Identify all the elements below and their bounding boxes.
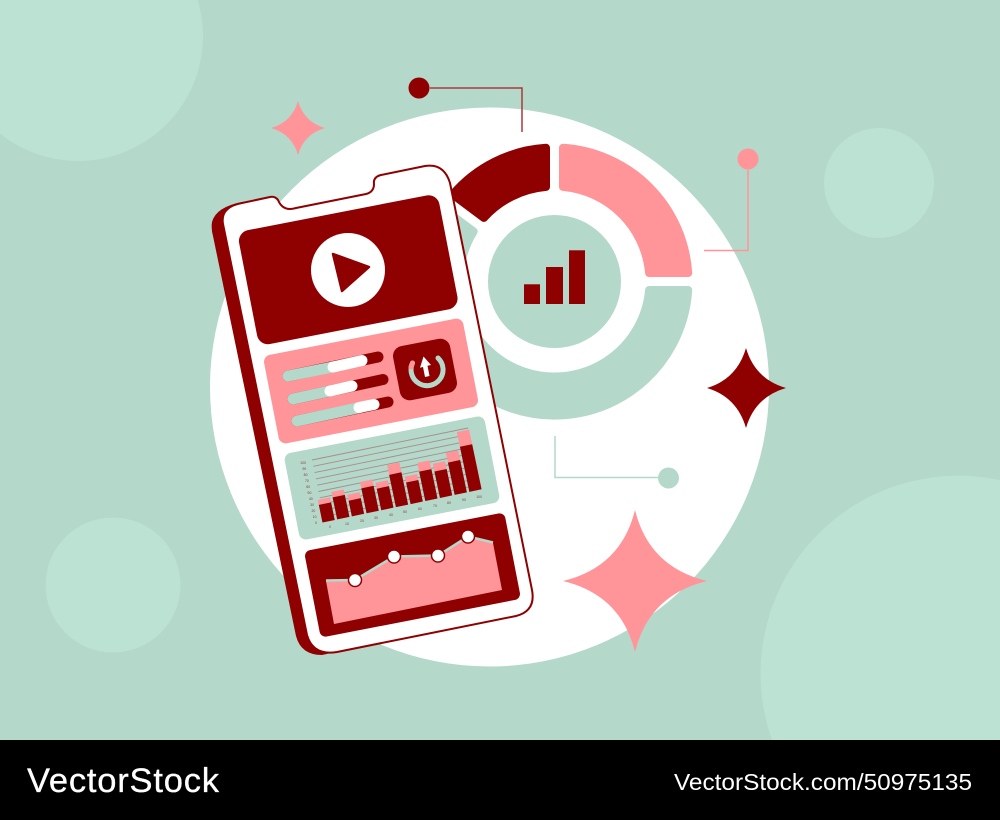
x axis labels: 0 xyxy=(329,525,331,529)
y axis labels: 30 xyxy=(310,503,314,507)
connector: dark red callout xyxy=(408,78,522,132)
decorative circle: lower left xyxy=(46,518,180,652)
phone body xyxy=(223,166,533,653)
connector: pink callout xyxy=(704,148,758,250)
decorative circle: top left xyxy=(0,0,203,161)
phone xyxy=(212,166,533,655)
y axis labels: 40 xyxy=(309,497,313,501)
phone back shadow xyxy=(212,202,345,655)
x axis labels: 90 xyxy=(462,498,466,502)
footer image id: VectorStock.com/50975135 xyxy=(674,769,972,795)
bars xyxy=(310,430,482,522)
area xyxy=(326,537,502,624)
y axis labels: 10 xyxy=(313,515,317,519)
y axis labels: 80 xyxy=(304,473,308,477)
data points xyxy=(348,530,474,586)
x axis labels: 80 xyxy=(447,501,451,505)
star: small pink xyxy=(271,101,325,155)
x axis labels xyxy=(329,495,482,529)
bar chart panel xyxy=(283,415,501,541)
y axis labels xyxy=(300,461,317,525)
y axis labels: 70 xyxy=(305,479,309,483)
icon: refresh with arrow xyxy=(391,337,459,402)
footer logo: VectorStock xyxy=(27,762,220,800)
settings panel xyxy=(263,317,479,445)
line xyxy=(326,536,493,580)
x axis labels: 10 xyxy=(345,522,349,526)
decorative circle: bottom right xyxy=(761,476,1000,740)
play button xyxy=(311,233,385,307)
y axis labels: 60 xyxy=(306,485,310,489)
x axis labels: 60 xyxy=(418,507,422,511)
donut segment: mint xyxy=(420,208,688,416)
line chart panel xyxy=(304,512,521,638)
slider 2 xyxy=(293,380,383,399)
donut chart xyxy=(420,148,688,416)
x axis labels: 20 xyxy=(360,519,364,523)
y axis labels: 0 xyxy=(315,521,317,525)
y axis labels: 20 xyxy=(311,509,315,513)
decorative circle: right xyxy=(824,128,934,238)
large white circle xyxy=(210,108,769,666)
y axis labels: 90 xyxy=(302,467,306,471)
donut segment: dark red xyxy=(453,148,546,218)
star: dark red xyxy=(707,348,786,428)
grid lines xyxy=(312,428,480,517)
x axis labels: 30 xyxy=(374,516,378,520)
slider 1 xyxy=(288,357,378,376)
x axis labels: 100 xyxy=(476,495,482,499)
x axis labels: 50 xyxy=(403,510,407,514)
footer band xyxy=(0,740,1000,820)
y axis labels: 100 xyxy=(300,461,306,465)
y axis labels: 50 xyxy=(308,491,311,495)
slider 3 xyxy=(297,402,388,421)
donut centre with bar icon xyxy=(488,215,621,348)
x axis labels: 70 xyxy=(433,504,437,508)
donut segment: pink xyxy=(563,148,688,273)
video panel xyxy=(237,193,459,346)
star: large pink xyxy=(563,510,707,652)
connector: mint callout xyxy=(555,436,679,488)
x axis labels: 40 xyxy=(389,513,393,517)
